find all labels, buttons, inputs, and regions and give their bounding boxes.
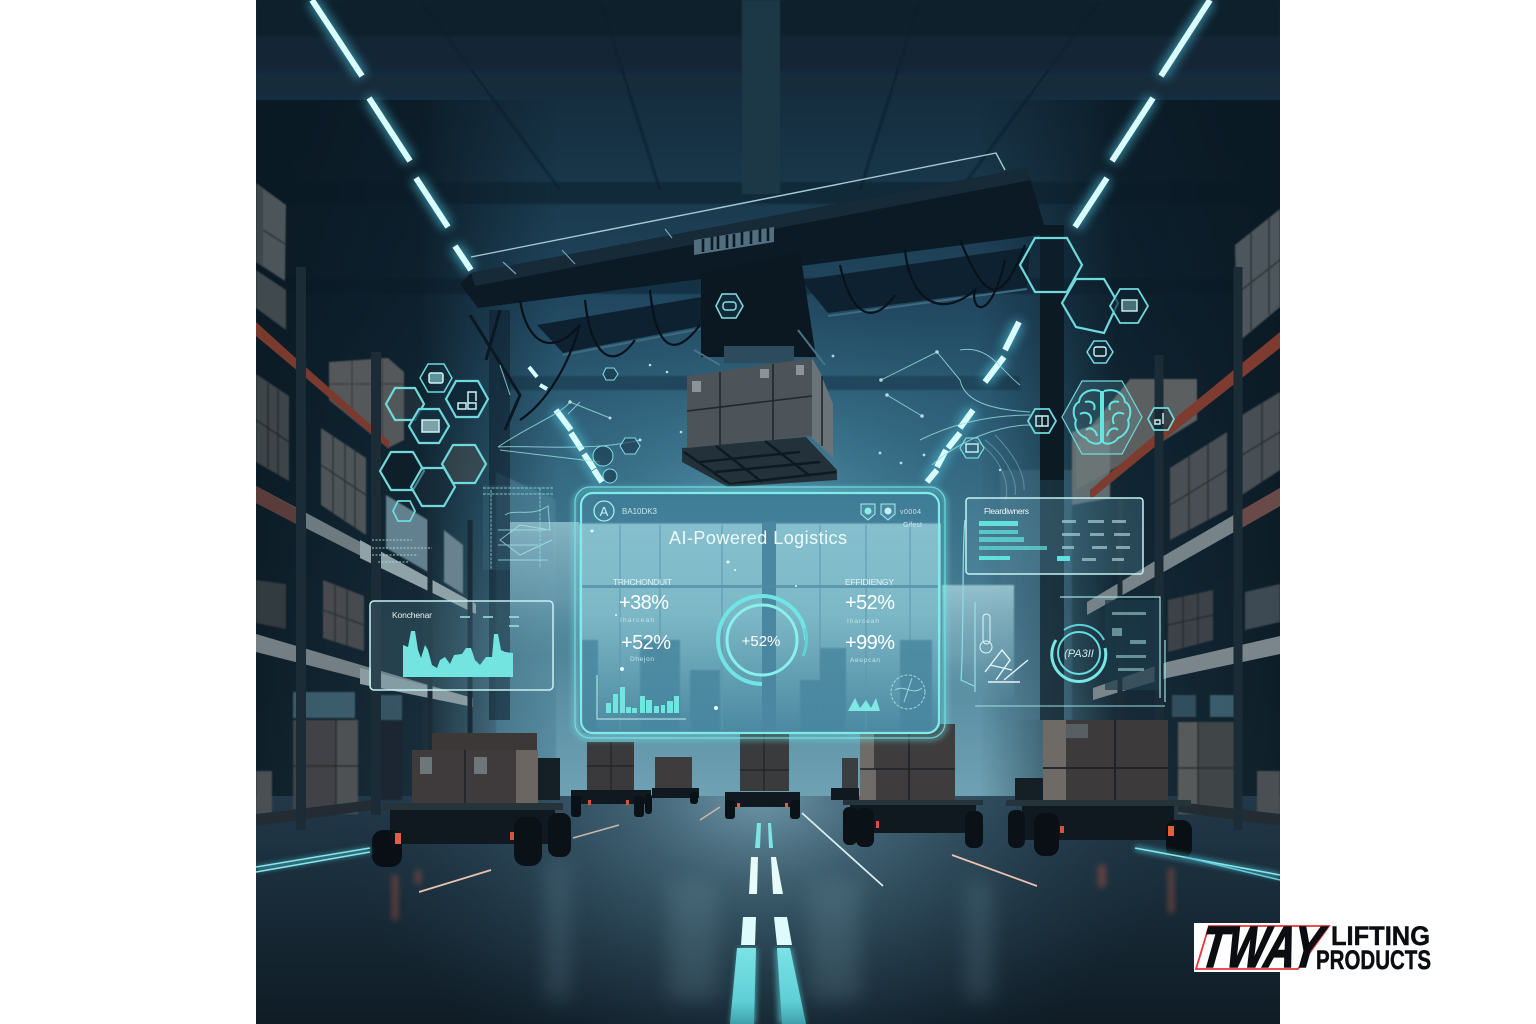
robot: far right distant	[831, 758, 859, 800]
progress ring: +52%	[742, 633, 780, 650]
left shelf beams	[256, 322, 389, 449]
area chart	[403, 631, 513, 677]
trolley	[701, 266, 816, 357]
right shelving	[1000, 209, 1280, 830]
panel: data holo top left	[372, 485, 553, 570]
circuit lines and nodes	[498, 349, 1030, 500]
mini peaks chart	[848, 698, 880, 711]
cartons	[687, 358, 812, 448]
robot: centre	[725, 734, 800, 819]
floor reflections	[546, 860, 992, 1000]
brain hexagon	[1062, 381, 1142, 454]
metrics left	[613, 577, 672, 663]
status icons: v0004	[900, 509, 921, 516]
panel frame	[581, 493, 939, 733]
data texture	[1112, 612, 1146, 671]
hex icons right	[966, 300, 1163, 452]
metrics left: +52%	[621, 632, 671, 654]
overhead crane	[460, 153, 1064, 720]
status icons	[861, 504, 922, 529]
metrics left: Dhejon	[630, 656, 654, 663]
metrics left: Iharceah	[620, 617, 654, 624]
specks	[590, 530, 797, 710]
progress ring	[718, 596, 806, 684]
robot: far left centre	[571, 742, 699, 817]
logo tagline: LIFTING	[1331, 921, 1430, 951]
gauge: (PA3II	[1064, 648, 1094, 660]
panel: chart left	[370, 601, 553, 690]
small centre hexagons	[593, 294, 743, 483]
panel title: Fleardiwners	[984, 506, 1029, 516]
panel glow	[575, 490, 945, 738]
metrics right: +99%	[845, 632, 895, 654]
hexagon network left	[380, 364, 488, 521]
panel: bars right	[966, 498, 1143, 574]
logo background	[1194, 923, 1431, 972]
floor markings	[256, 807, 1280, 1024]
infographic canvas	[256, 0, 1430, 1024]
metrics right: +52%	[845, 592, 895, 614]
gauge	[1052, 625, 1106, 681]
window structure and skyline	[580, 522, 940, 732]
metrics right: Iharceah	[847, 618, 879, 625]
panel: main dashboard	[575, 487, 945, 738]
hexagon network right	[960, 238, 1174, 458]
hex icons left	[422, 373, 476, 432]
panel title: Konchenar	[392, 610, 432, 620]
lane dashes	[730, 823, 806, 1024]
robot: left	[372, 733, 571, 867]
logo wordmark: TWAY	[1197, 915, 1330, 980]
horizontal bars	[979, 521, 1070, 561]
hanging cables	[520, 240, 1025, 420]
metrics right: Aeepcan	[850, 657, 880, 664]
right shelf beams	[1090, 332, 1280, 500]
logo badge	[594, 501, 614, 521]
back wall and ceiling	[256, 0, 1280, 840]
data grid	[1062, 520, 1130, 561]
status icons: Gifest	[903, 522, 922, 529]
robot: centre right	[843, 724, 983, 848]
panel body	[579, 492, 941, 734]
cross beam rear	[537, 247, 1030, 355]
robot: right	[1006, 720, 1192, 858]
metrics left: TRHCHONDUIT	[613, 577, 672, 587]
warehouse scene	[256, 0, 1280, 1024]
plant sketch	[985, 650, 1028, 682]
metrics left: +38%	[619, 592, 669, 614]
metrics right: EFFIDIENGY	[845, 577, 894, 587]
bar chart	[597, 675, 686, 719]
left shelving	[256, 183, 556, 830]
ceiling light strips	[312, 0, 1210, 482]
robots and cargo	[372, 720, 1192, 867]
floor	[256, 796, 1280, 1024]
logo tagline: PRODUCTS	[1316, 945, 1431, 975]
logo tagline	[1316, 921, 1431, 975]
left boxes	[256, 183, 556, 817]
thermometer icon	[980, 614, 992, 653]
logo badge: A	[600, 504, 609, 519]
panel: gauge right	[961, 520, 1165, 706]
logo	[1194, 915, 1431, 980]
header label: BA10DK3	[622, 507, 658, 516]
barcode label	[694, 227, 774, 255]
main girder	[460, 168, 1047, 308]
globe	[891, 675, 925, 709]
suspended pallet of boxes	[682, 358, 837, 487]
title: AI-Powered Logistics	[669, 528, 847, 548]
right boxes	[1000, 209, 1280, 817]
pallet	[682, 437, 837, 487]
metrics right	[845, 577, 895, 664]
translucent backdrop band	[510, 522, 1014, 700]
